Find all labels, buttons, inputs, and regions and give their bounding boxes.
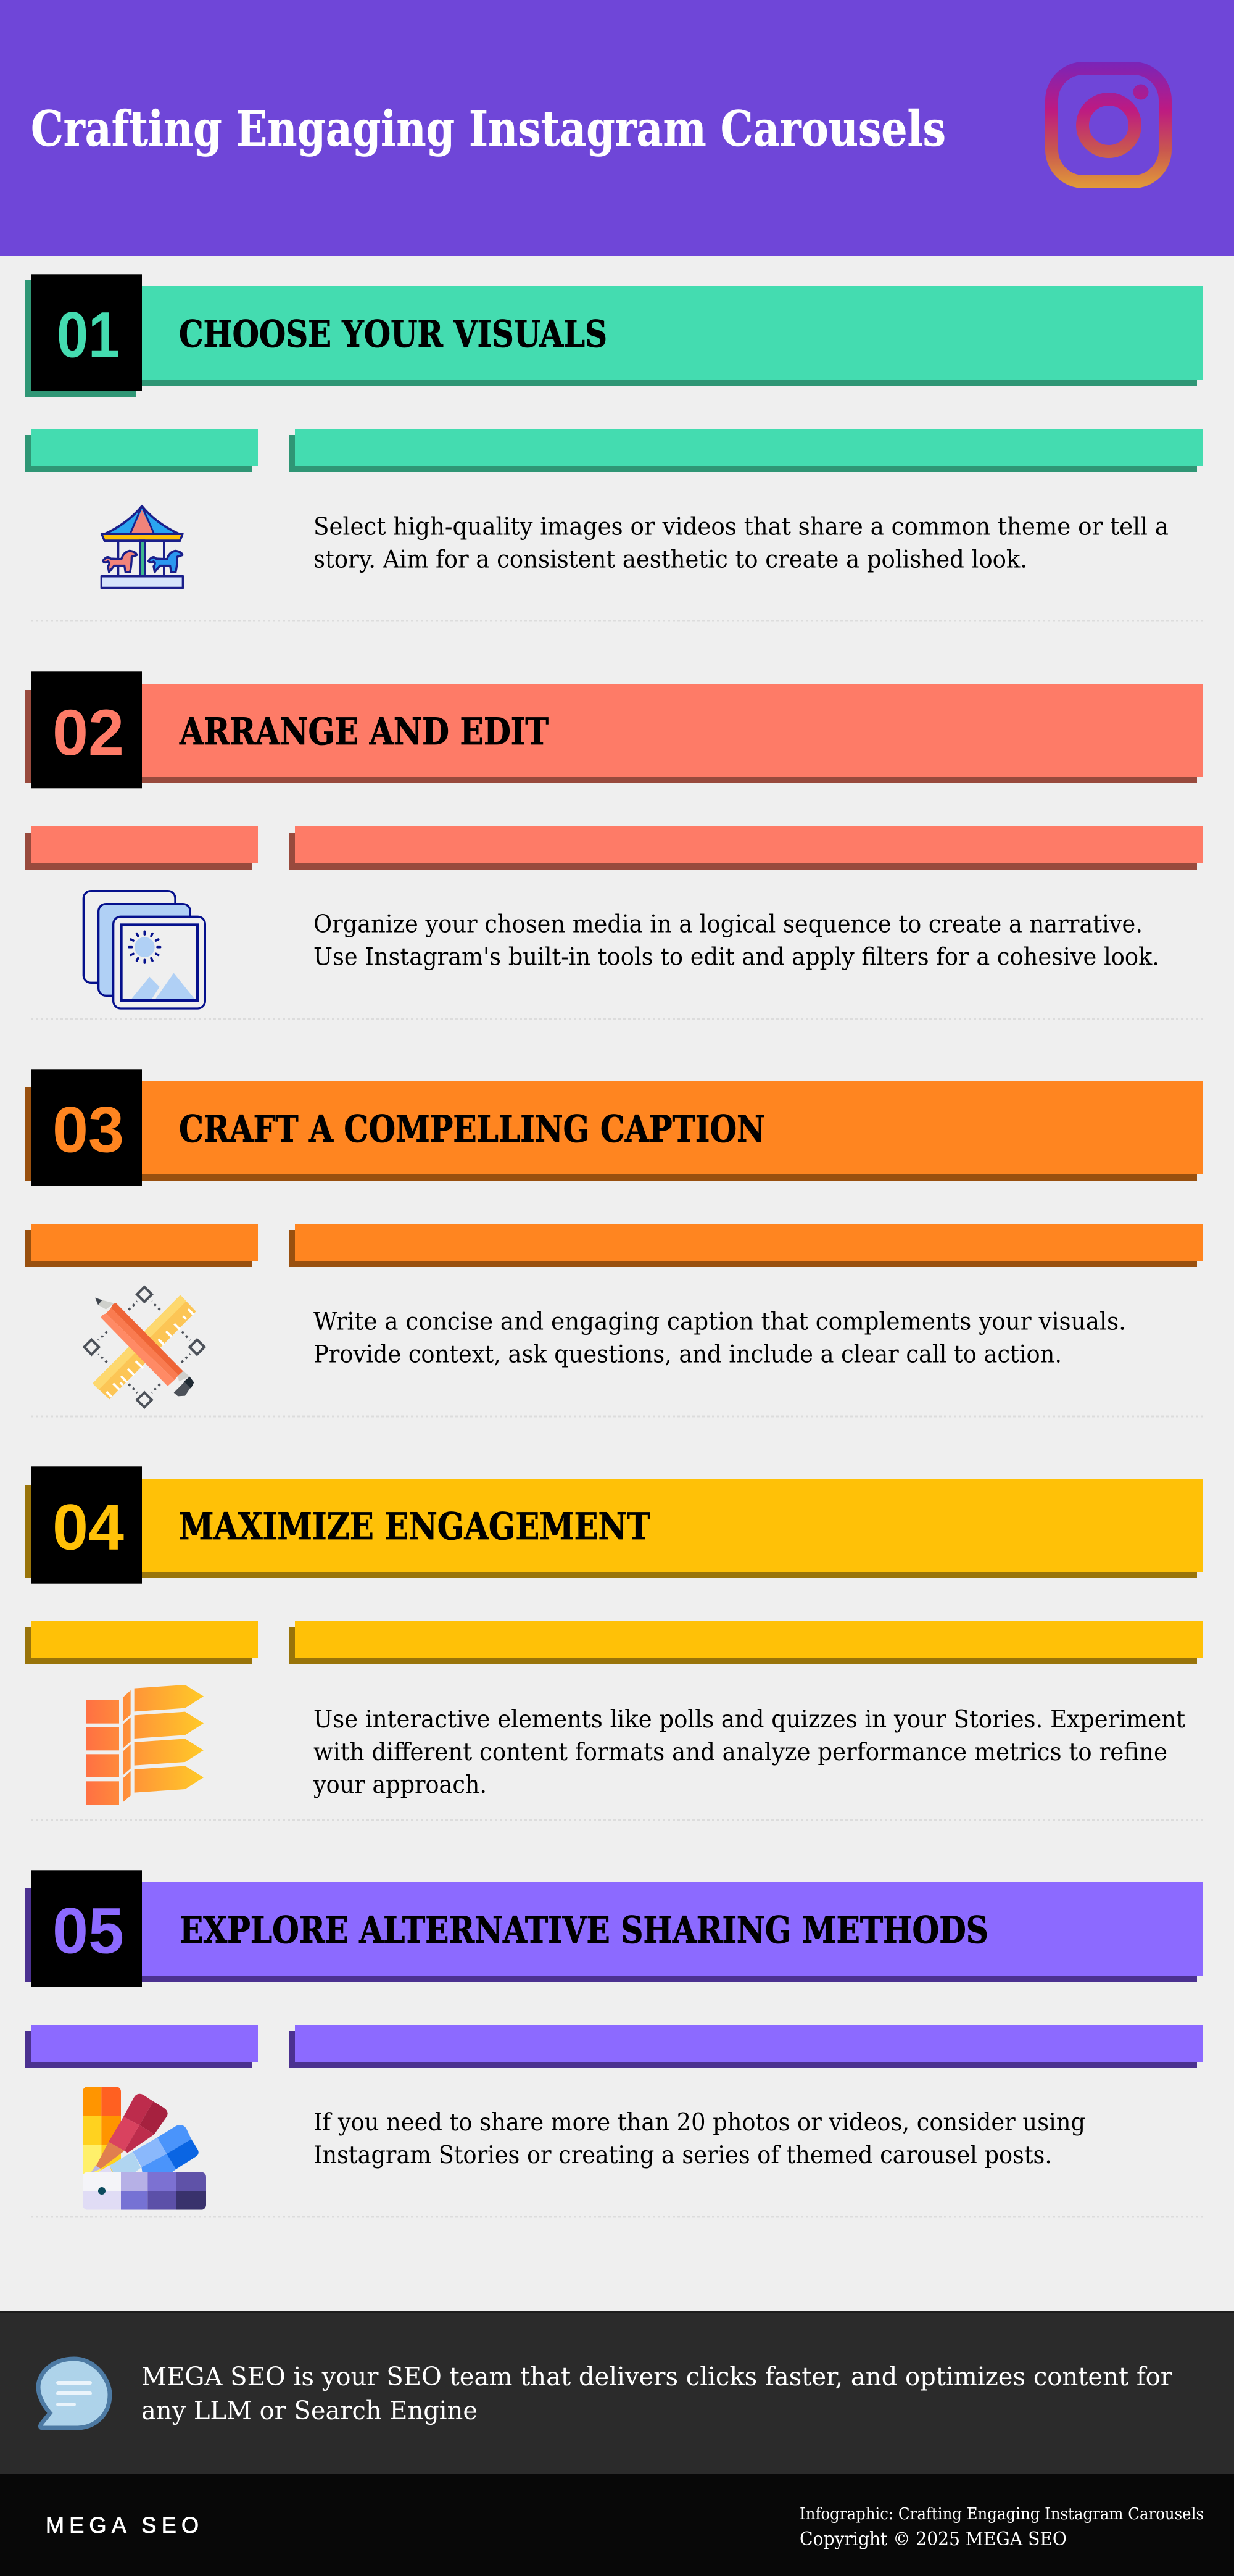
step number: 01 [57, 299, 120, 372]
icon: colour swatch fan [83, 2087, 206, 2210]
step number: 02 [52, 697, 124, 769]
panel: footer [0, 2474, 1234, 2576]
logo wordmark: MEGA SEO [46, 2512, 199, 2538]
description [313, 911, 1159, 971]
description: your approach. [313, 1771, 487, 1799]
title: Crafting Engaging Instagram Carousels [31, 100, 946, 157]
panel: step 4 maximize engagement [25, 1466, 1203, 1820]
callout text [141, 2362, 1172, 2425]
description: Provide context, ask questions, and include a clear call to action. [313, 1340, 1062, 1369]
sub-header bars [25, 2025, 1203, 2068]
step number: 05 [52, 1895, 124, 1967]
description: Select high-quality images or videos that share a common theme or tell a [313, 513, 1169, 541]
description [313, 2109, 1085, 2169]
description: story. Aim for a consistent aesthetic to create a polished look. [313, 546, 1027, 574]
icon: carousel [101, 506, 183, 588]
panel: mega seo callout [0, 2311, 1234, 2474]
description [313, 1308, 1126, 1369]
description [313, 513, 1169, 574]
panel: step 3 craft a compelling caption [25, 1069, 1203, 1416]
icon: speech bubble [38, 2359, 110, 2428]
heading: EXPLORE ALTERNATIVE SHARING METHODS [180, 1909, 988, 1952]
sub-header bars [25, 826, 1203, 870]
description: Organize your chosen media in a logical sequence to create a narrative. [313, 911, 1143, 938]
heading: CHOOSE YOUR VISUALS [179, 313, 607, 356]
description: Use interactive elements like polls and quizzes in your Stories. Experiment [313, 1706, 1185, 1734]
sub-header bars [25, 429, 1203, 472]
panel: step 2 arrange and edit [25, 671, 1203, 1019]
panel: step 5 explore alternative sharing methods [25, 1870, 1203, 2217]
heading: CRAFT A COMPELLING CAPTION [179, 1108, 765, 1151]
step number: 03 [52, 1094, 124, 1166]
credit line: Infographic: Crafting Engaging Instagram Carousels [800, 2505, 1204, 2524]
icon: instagram logo [1051, 68, 1165, 181]
icon: stacked photos [83, 891, 205, 1008]
icon: tabbed arrows [86, 1685, 204, 1805]
sub-header bars [25, 1621, 1203, 1664]
sub-header bars [25, 1224, 1203, 1267]
description: with different content formats and analyze performance metrics to refine [313, 1739, 1167, 1766]
description: Write a concise and engaging caption that complements your visuals. [313, 1308, 1126, 1336]
header banner [0, 0, 1234, 256]
heading: ARRANGE AND EDIT [179, 710, 549, 754]
description [313, 1706, 1185, 1799]
description: Instagram Stories or creating a series of themed carousel posts. [313, 2142, 1052, 2169]
step number: 04 [52, 1491, 124, 1564]
heading: MAXIMIZE ENGAGEMENT [179, 1505, 650, 1548]
description: Use Instagram's built-in tools to edit and apply filters for a cohesive look. [313, 943, 1159, 971]
icon: pencil and ruler [84, 1287, 204, 1407]
callout text: MEGA SEO is your SEO team that delivers clicks faster, and optimizes content for [141, 2362, 1172, 2391]
callout text: any LLM or Search Engine [141, 2396, 478, 2425]
panel: step 1 choose your visuals [25, 274, 1203, 621]
description: If you need to share more than 20 photos or videos, consider using [313, 2109, 1085, 2137]
copyright line: Copyright © 2025 MEGA SEO [800, 2528, 1067, 2550]
